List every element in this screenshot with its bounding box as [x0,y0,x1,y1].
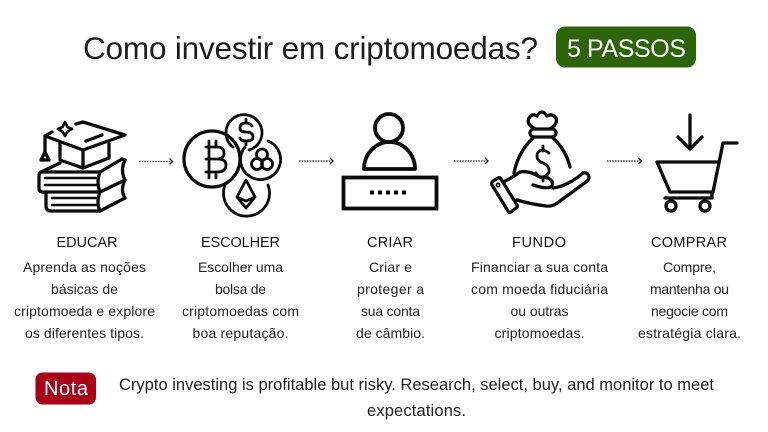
step 4: fundo: Financiar a sua conta [471,259,608,275]
step 4: fundo: criptomoedas. [494,325,584,341]
step 5: comprar: estratégia clara. [638,325,741,341]
arrow 3 [454,158,488,164]
step 2: escolher: bolsa de [215,281,266,297]
icon: cryptocurrency coins [184,115,281,216]
badge: 5 passos [556,26,696,68]
icon: books and graduation cap [39,122,125,211]
icon: shopping cart [657,115,737,211]
step 5: comprar: mantenha ou [650,281,729,297]
icon: user account [344,114,436,208]
step 5: comprar: negocie com [651,303,728,319]
badge: nota [36,372,96,404]
step 1: educar: Aprenda as noções [23,259,146,275]
step 5: comprar: Compre, [663,259,716,275]
step 3: criar: proteger a [357,281,424,297]
step 4: fundo [471,235,608,341]
icon: money bag in hand [492,112,589,212]
step 2: escolher: Escolher uma [198,259,283,275]
step 2: escolher [182,235,299,341]
arrow 2 [299,158,333,164]
badge: 5 passos: 5 PASSOS [567,35,686,63]
step 2: escolher: criptomoedas com [182,303,299,319]
arrow 4 [607,158,642,164]
step 1: educar [14,235,155,341]
title: Como investir em criptomoedas? [83,30,538,66]
step 3: criar: Criar e [369,259,412,275]
step 3: criar: sua conta [361,303,420,319]
note text: Crypto investing is profitable but risky. Research, select, buy, and monitor to meet [119,376,714,394]
step 1: educar: básicas de [51,281,118,297]
step 2: escolher: ESCOLHER [201,235,280,251]
step 1: educar: EDUCAR [56,235,118,251]
step 4: fundo: FUNDO [512,235,566,251]
step 1: educar: os diferentes tipos. [25,325,144,341]
step 4: fundo: com moeda fiduciária [471,281,608,297]
step 1: educar: criptomoeda e explore [14,303,155,319]
step 4: fundo: ou outras [510,303,568,319]
arrow 1 [139,158,172,164]
step 2: escolher: boa reputação. [192,325,288,341]
step 3: criar [356,235,425,341]
step 5: comprar [638,235,741,341]
badge: nota: Nota [44,378,89,400]
step 3: criar: CRIAR [367,235,413,251]
step 3: criar: de câmbio. [356,325,425,341]
note text: expectations. [367,402,466,420]
step 5: comprar: COMPRAR [651,235,727,251]
note text [119,376,714,420]
